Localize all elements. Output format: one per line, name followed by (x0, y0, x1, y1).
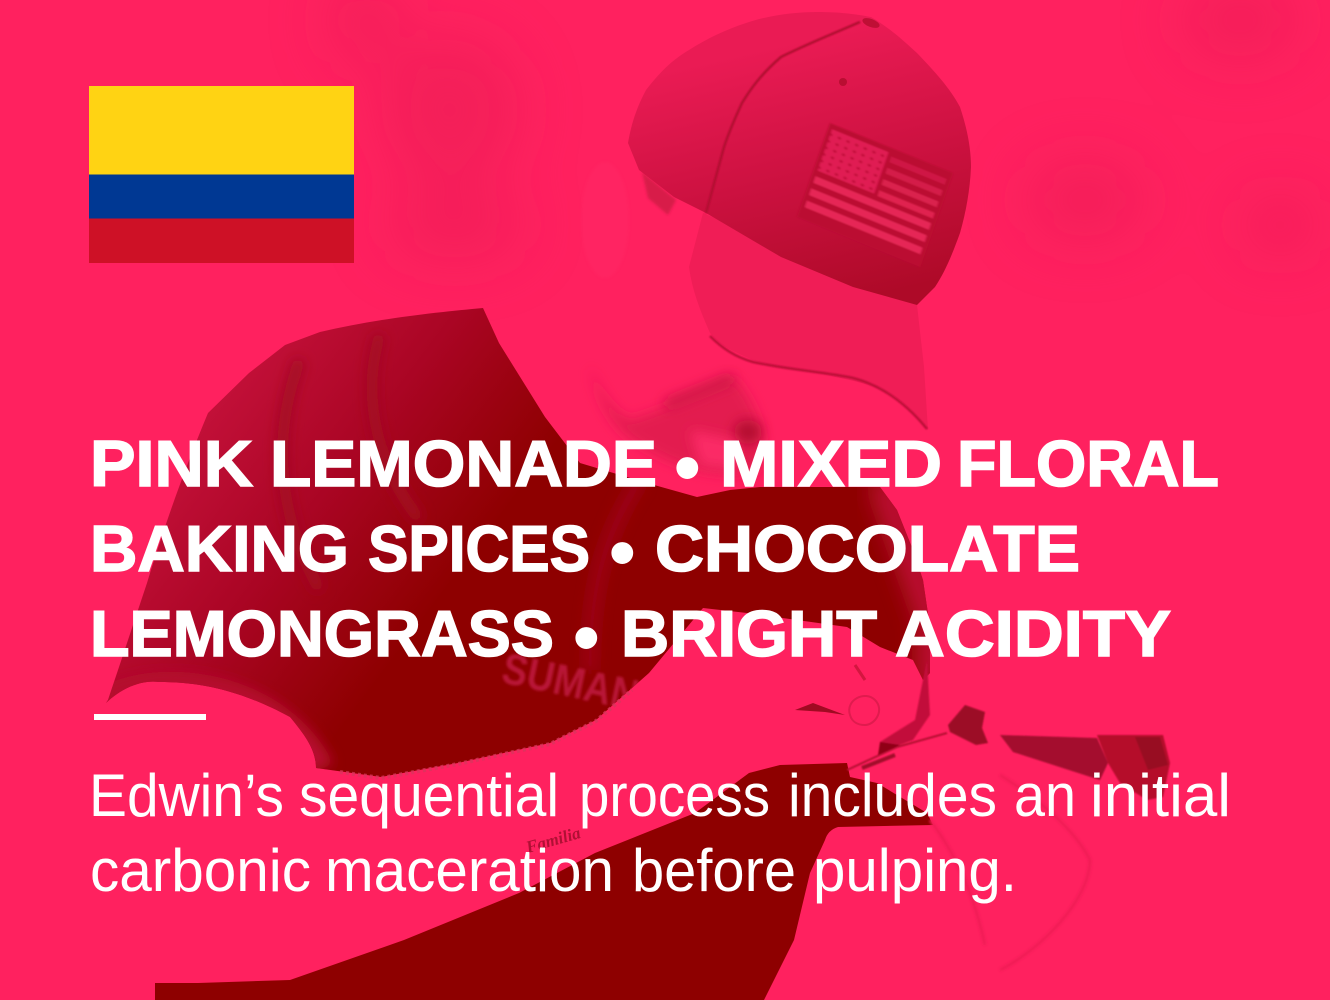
heading: flavour notes: • (674, 425, 701, 510)
description text: carbonic (90, 837, 311, 904)
heading: flavour notes: PINK (90, 428, 253, 500)
cap seam and button (706, 16, 881, 213)
heading: flavour notes (90, 425, 1219, 680)
ear (581, 162, 629, 278)
heading: flavour notes: LEMONADE (270, 428, 657, 500)
grip (1000, 735, 1108, 780)
second hand outline (930, 775, 1090, 970)
shadow behind hand (880, 660, 930, 752)
t-shirt below arm (155, 763, 933, 1000)
description text: includes (788, 762, 997, 829)
t-shirt upper body: SUMAND (498, 644, 670, 726)
description text: Edwin’s (89, 762, 284, 829)
refractometer (847, 660, 1170, 800)
heading: flavour notes: BAKING (90, 513, 349, 585)
arm tattoo: Familia (523, 823, 583, 857)
blurred background foliage (330, 0, 1320, 260)
cap brim (689, 213, 928, 430)
heading: flavour notes: BRIGHT (621, 598, 877, 670)
description text: an (1014, 762, 1076, 829)
cap flag patch (797, 123, 953, 267)
heading: flavour notes: SPICES (368, 513, 590, 585)
heading: flavour notes: ACIDITY (895, 598, 1171, 670)
description text: initial (1090, 762, 1231, 829)
description text: before (632, 837, 796, 904)
divider rule (94, 714, 206, 720)
heading: flavour notes: MIXED (720, 428, 942, 500)
description text: pulping. (813, 837, 1017, 904)
cap crown (628, 12, 971, 305)
heading: flavour notes: LEMONGRASS (90, 598, 554, 670)
prism mount (948, 705, 988, 745)
flag: Colombia (89, 86, 354, 263)
heading: flavour notes: FLORAL (957, 428, 1219, 500)
eyepiece (1097, 735, 1170, 800)
cap brim edge line (710, 336, 927, 429)
heading: flavour notes: CHOCOLATE (655, 513, 1080, 585)
heading: flavour notes: • (609, 510, 636, 595)
finger gap and details (795, 665, 879, 725)
description text: sequential (299, 762, 559, 829)
hair under cap (642, 172, 676, 215)
description text: process (579, 762, 770, 829)
heading: flavour notes: • (573, 595, 600, 680)
arm hair edge (340, 690, 632, 778)
prism edge (847, 733, 947, 770)
t-shirt upper body (106, 308, 930, 777)
beard and mouth (590, 367, 763, 474)
description text: maceration (325, 837, 614, 904)
description text (89, 762, 1231, 904)
